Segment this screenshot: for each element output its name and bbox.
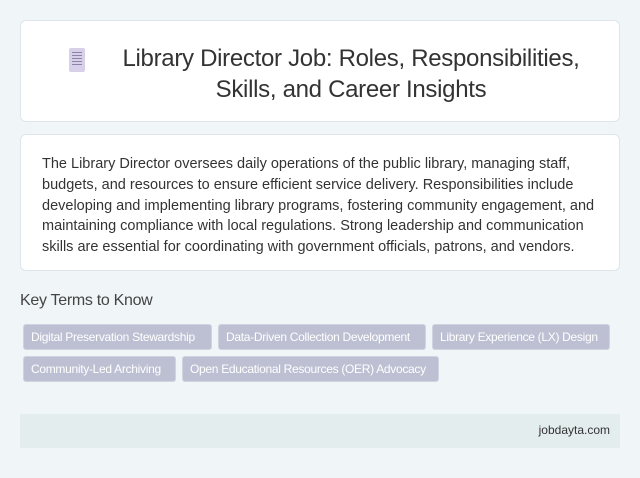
title — [122, 45, 580, 103]
icon: scroll — [69, 48, 85, 72]
tag 4: Community-Led Archiving — [31, 362, 161, 376]
tag 3: Library Experience (LX) Design — [440, 330, 598, 344]
description text: The Library Director oversees daily operations of the public library, managing staff, — [42, 156, 570, 172]
footer text: jobdayta.com — [539, 423, 610, 437]
tag 5: Open Educational Resources (OER) Advocacy — [190, 362, 426, 376]
title: Library Director Job: Roles, Responsibilities, — [122, 45, 580, 72]
tag 2 — [218, 324, 426, 350]
description text: skills are essential for coordinating with government officials, patrons, and vendors. — [42, 239, 574, 255]
footer — [20, 414, 620, 448]
tag 2: Data-Driven Collection Development — [226, 330, 410, 344]
description text: developing and implementing library programs, fostering community engagement, and — [42, 198, 594, 214]
title: Skills, and Career Insights — [216, 76, 486, 103]
tag 1: Digital Preservation Stewardship — [31, 330, 195, 344]
description text: budgets, and resources to ensure efficient service delivery. Responsibilities include — [42, 177, 573, 193]
description text — [42, 156, 594, 255]
tag 5 — [182, 356, 439, 382]
tag 1 — [23, 324, 212, 350]
header card — [20, 20, 620, 122]
heading: key terms: Key Terms to Know — [20, 292, 152, 309]
tag 4 — [23, 356, 176, 382]
description card — [20, 134, 620, 271]
description text: maintaining compliance with local regulations. Strong leadership and communication — [42, 218, 584, 234]
tag 3 — [432, 324, 610, 350]
